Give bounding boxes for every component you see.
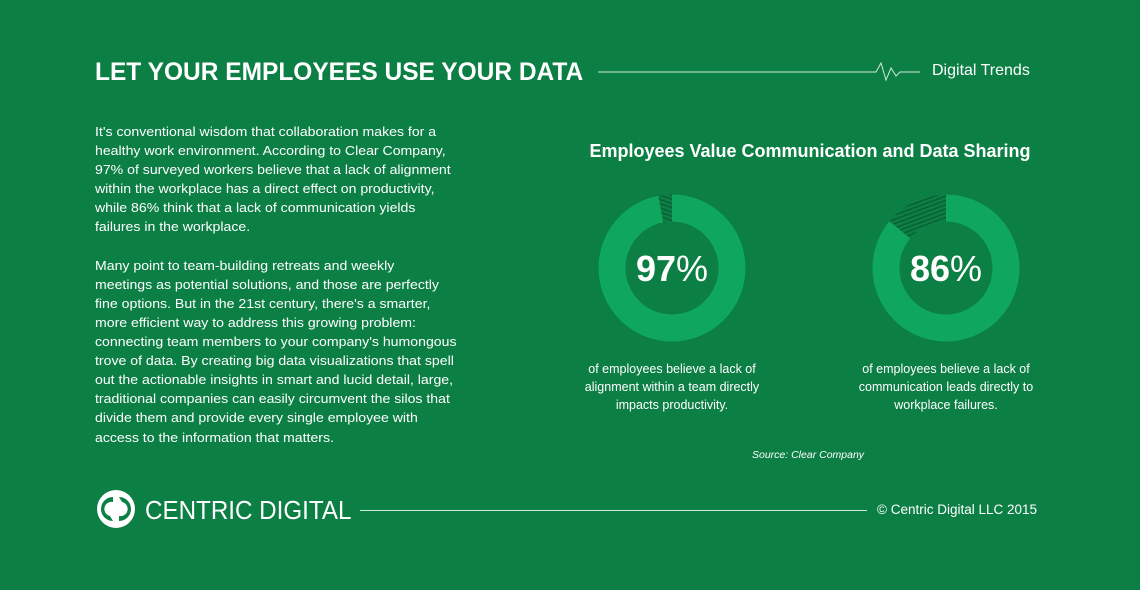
body text: within the workplace has a direct effect on productivity, [95, 181, 434, 196]
body text: 97% of surveyed workers believe that a lack of alignment [95, 162, 451, 177]
logo icon [97, 490, 135, 528]
body text: meetings as potential solutions, and those are perfectly [95, 277, 439, 292]
header tag: Digital Trends [932, 62, 1030, 79]
body text: trove of data. By creating big data visualizations that spell [95, 353, 454, 368]
title: LET YOUR EMPLOYEES USE YOUR DATA [95, 58, 583, 86]
donut 86: 86% [910, 248, 982, 289]
body text: fine options. But in the 21st century, there's a smarter, [95, 296, 430, 311]
body text: connecting team members to your company's humongous [95, 334, 457, 349]
logo text: CENTRIC DIGITAL [145, 495, 351, 525]
body text: failures in the workplace. [95, 219, 250, 234]
donut 86 [862, 184, 1030, 352]
body text: divide them and provide every single employee with [95, 410, 418, 425]
caption 86: of employees believe a lack of communication leads directly to workplace failures. [859, 362, 1033, 412]
body text: access to the information that matters. [95, 430, 334, 444]
donut 97: 97% [636, 248, 708, 289]
body text: traditional companies can easily circumvent the silos that [95, 391, 450, 406]
source: Source: Clear Company [752, 449, 864, 461]
body text: more efficient way to address this growing problem: [95, 315, 416, 330]
caption 97: of employees believe a lack of alignment within a team directly impacts productivity. [585, 362, 759, 412]
body text: It's conventional wisdom that collaboration makes for a [95, 124, 436, 139]
body text [95, 124, 457, 444]
copyright: © Centric Digital LLC 2015 [877, 502, 1037, 517]
body text: while 86% think that a lack of communication yields [95, 200, 415, 215]
chart heading: Employees Value Communication and Data Sharing [589, 141, 1031, 161]
donut 97 [602, 198, 742, 338]
body text: healthy work environment. According to Clear Company, [95, 143, 446, 158]
header line with pulse [598, 62, 920, 82]
body text: out the actionable insights in smart and lucid detail, large, [95, 372, 453, 387]
footer line [360, 510, 867, 511]
body text: Many point to team-building retreats and weekly [95, 258, 394, 273]
